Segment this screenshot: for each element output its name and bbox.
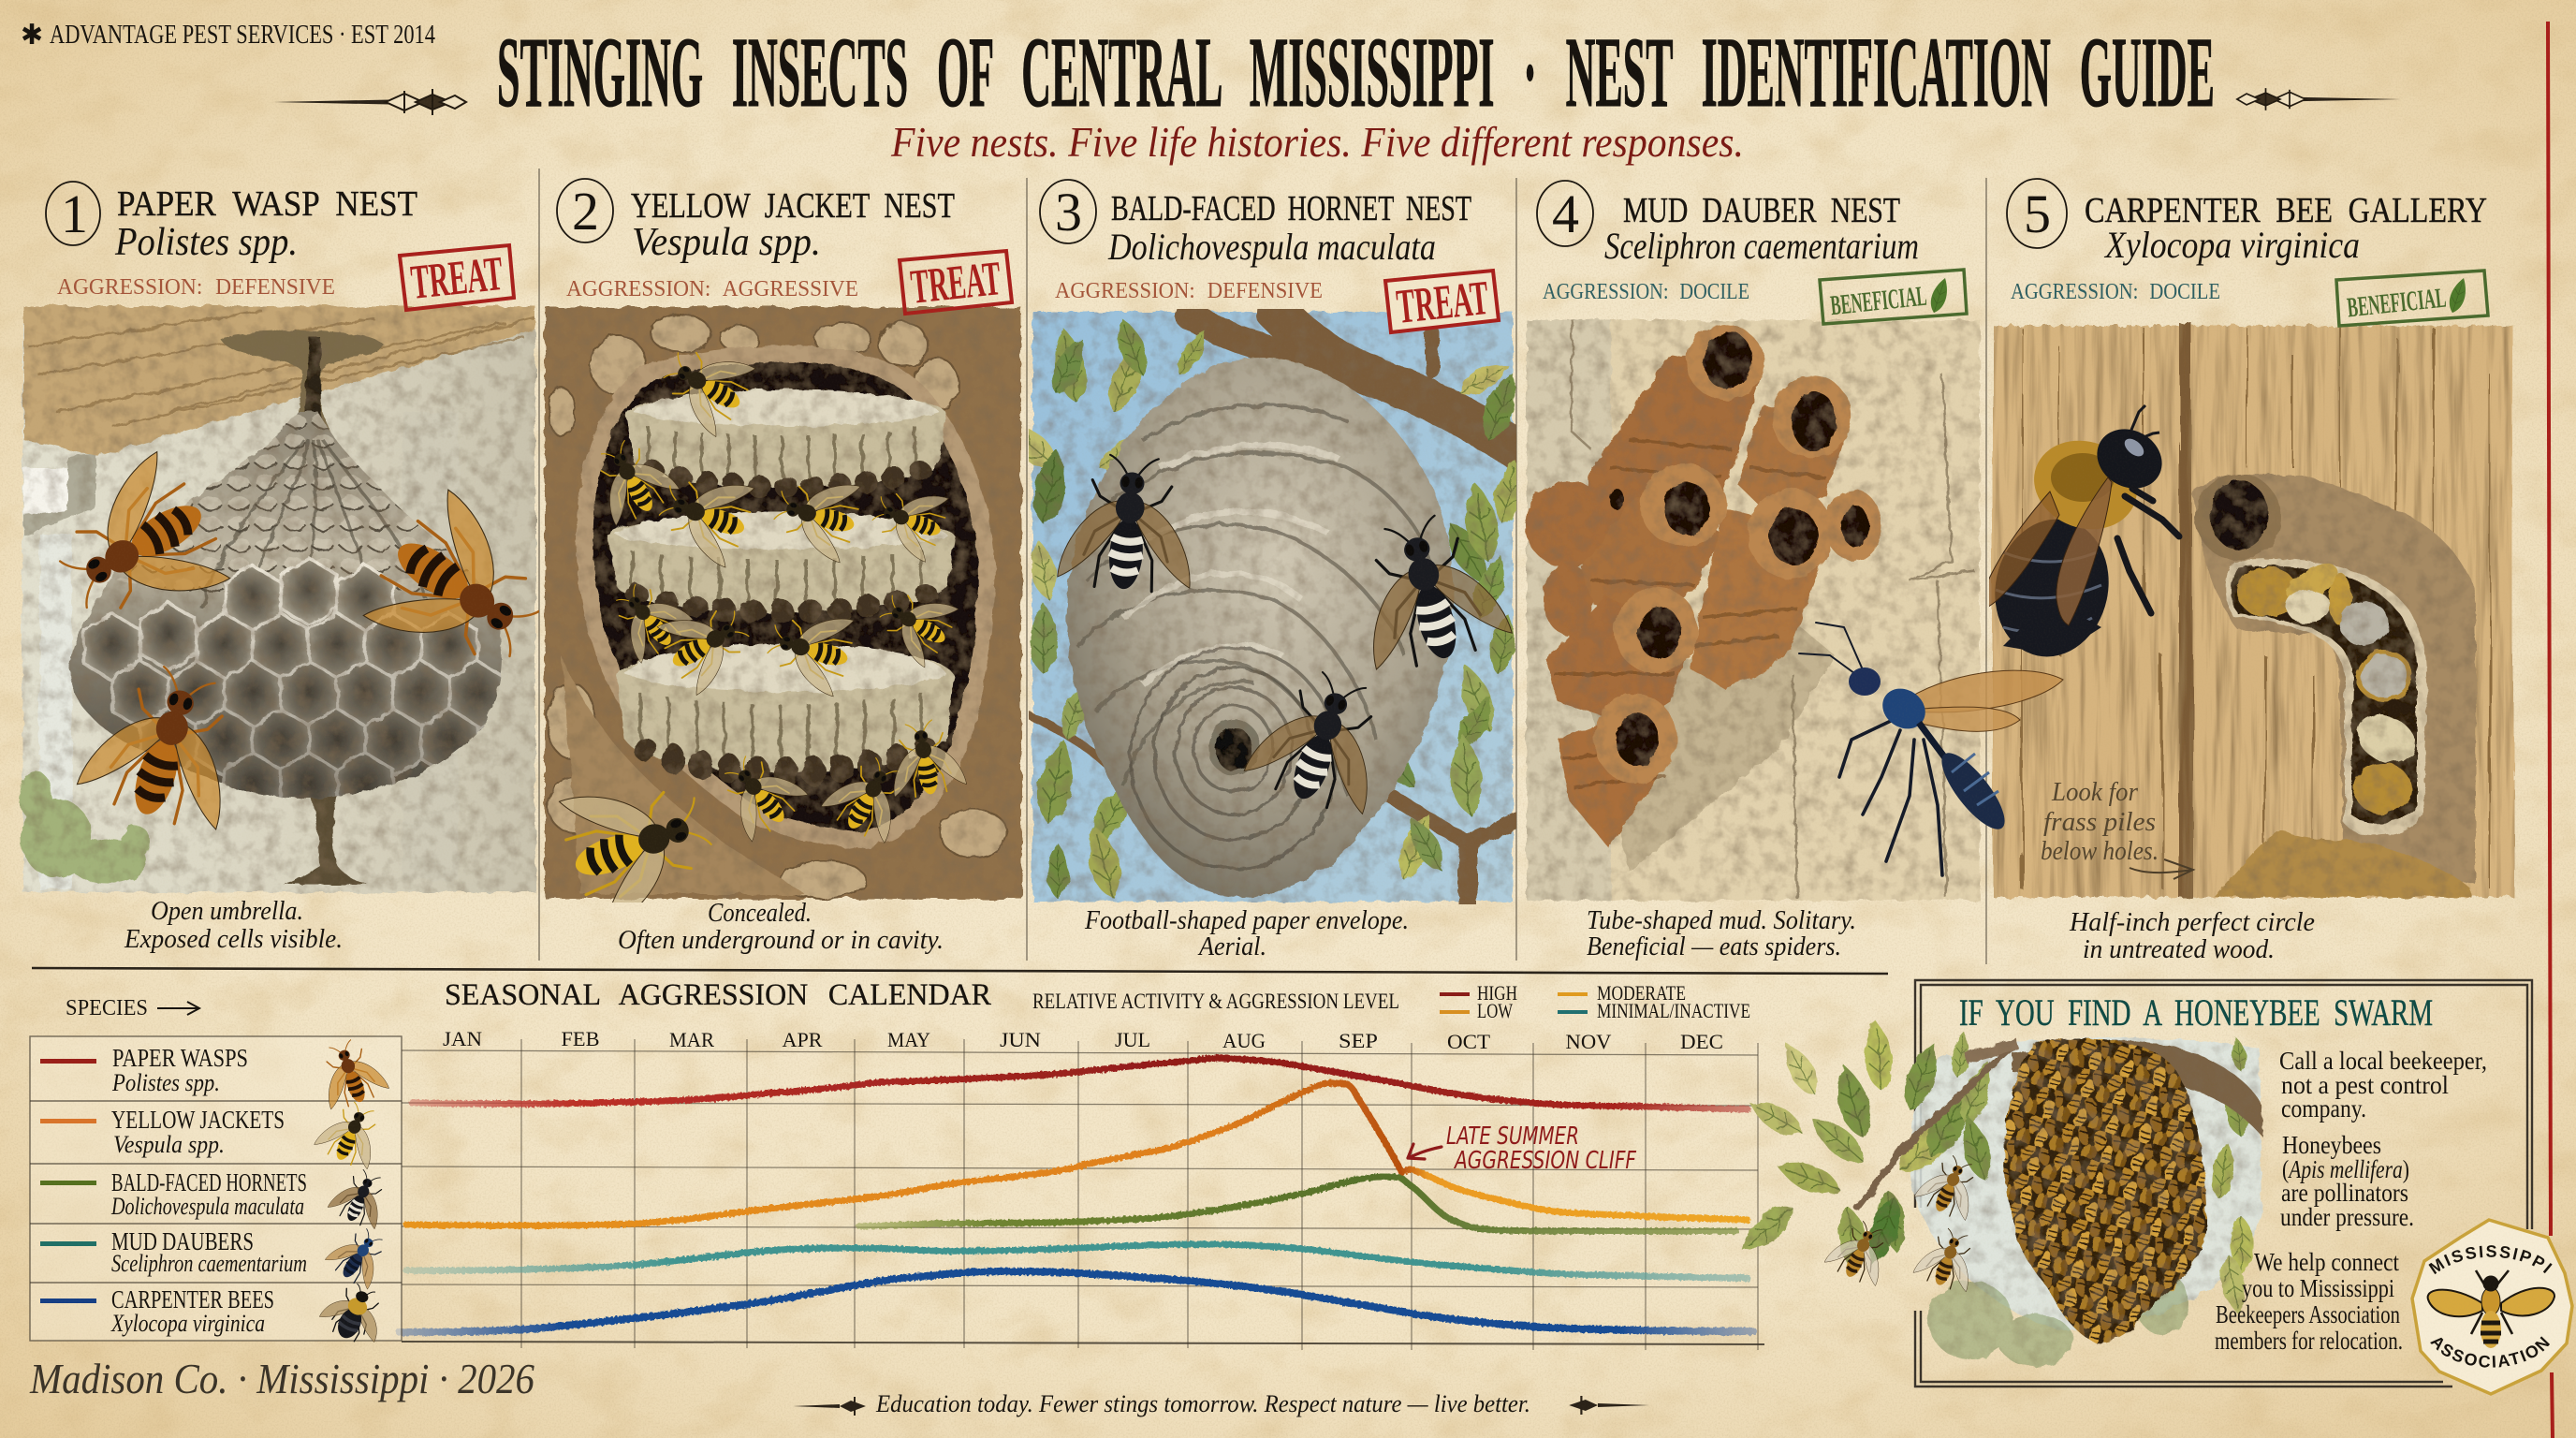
chart grid [402,1039,1764,1350]
curve: bald-faced hornets [859,1177,1736,1231]
flying honeybees [1823,1149,1988,1295]
caption 5: Half-inch perfect circle [2069,907,2315,937]
paper wasp left [58,451,231,609]
curve: mud daubers [406,1244,1748,1278]
medallion: Mississippi Beekeepers Association: ASSOCIATION [2430,1336,2550,1368]
red margin line [2548,22,2553,1438]
caption 1: Exposed cells visible. [124,924,343,954]
mud dauber wasp [1799,623,2063,875]
caption 5 [2069,907,2315,964]
panel 5 header: AGGRESSION: DOCILE [2011,280,2220,304]
caption 4 [1587,905,1856,961]
brand tag: ✱ [21,19,43,51]
yellow jacket group [553,331,967,931]
activity label: RELATIVE ACTIVITY & AGGRESSION LEVEL [1032,990,1399,1013]
row: carpenter bees: CARPENTER BEES [111,1285,274,1313]
column dividers [539,169,1986,964]
month labels: MAR [669,1028,714,1051]
honeybee text top: Call a local beekeeper, [2279,1047,2487,1075]
month labels: DEC [1680,1030,1723,1053]
honeybee text top: company. [2281,1094,2366,1123]
curve: carpenter bees [400,1271,1753,1332]
row: carpenter bees: Xylocopa virginica [110,1310,265,1337]
callout: late summer aggression cliff: AGGRESSION CLIFF [1453,1147,1637,1175]
honeybee text lower [2215,1248,2403,1355]
caption 1: Open umbrella. [151,896,303,926]
panel 2 header [557,179,955,301]
illustration 3: bald-faced hornet nest [995,312,1528,908]
callout: late summer aggression cliff [1408,1123,1637,1175]
note: frass piles: Look for [2051,777,2139,807]
honeybee text middle: are pollinators [2281,1179,2408,1207]
month labels: MAY [887,1028,930,1051]
note: frass piles: frass piles [2043,807,2156,837]
panel 5 header [2007,179,2487,304]
panel 3 header: AGGRESSION: DEFENSIVE [1055,279,1323,303]
panel 4 header: AGGRESSION: DOCILE [1543,280,1749,304]
hornets [1057,451,1514,820]
row: yellow jackets: YELLOW JACKETS [111,1106,285,1134]
month labels: OCT [1447,1030,1491,1053]
month labels: JUL [1115,1028,1150,1051]
row: yellow jackets [40,1094,390,1172]
activity legend: MINIMAL/INACTIVE [1597,999,1750,1022]
stamp: treat 2 [900,251,1012,315]
carpenter bee [1979,405,2179,668]
species table [30,1034,402,1350]
panel 4 header: Sceliphron caementarium [1604,225,1919,267]
panel 3 header [1040,180,1471,303]
row: carpenter bees [40,1275,393,1350]
stamp: beneficial 4 [1820,270,1967,324]
note: frass piles [2041,777,2159,866]
caption 2 [618,898,944,955]
brand tag [21,19,435,51]
species label: SPECIES [66,996,148,1020]
caption 5: in untreated wood. [2083,934,2275,964]
panel 1 header: AGGRESSION: DEFENSIVE [57,275,335,300]
caption 1 [124,896,343,954]
panel 2 header: AGGRESSION: AGGRESSIVE [566,277,858,301]
line chart curves [400,1058,1753,1332]
ornament left [273,89,466,115]
illustration 2: yellow jacket nest [545,307,1021,931]
month labels: NOV [1565,1030,1612,1053]
subtitle: Five nests. Five life histories. Five different responses. [890,119,1744,166]
month labels [443,1027,1723,1053]
caption 3: Football-shaped paper envelope. [1084,905,1409,935]
honeybee text top [2279,1047,2487,1123]
panel 4 header: MUD DAUBER NEST [1623,191,1900,230]
panel 2 header: 2 [572,181,599,242]
paper wasp right [362,489,539,657]
paper wasp lower [77,665,224,830]
panel 5 header: CARPENTER BEE GALLERY [2085,191,2487,230]
row: mud daubers [40,1220,396,1291]
caption 3: Aerial. [1197,932,1266,961]
month labels: APR [783,1028,823,1051]
double border [1915,980,2532,1387]
illustration 5: carpenter bee gallery [1979,323,2513,898]
medallion bee [2428,1270,2554,1348]
honeybee text lower: members for relocation. [2215,1327,2403,1355]
panel 2 header: YELLOW JACKET NEST [631,186,955,226]
stamp: beneficial 5: BENEFICIAL [2346,283,2448,323]
panel 2 header: Vespula spp. [632,221,821,264]
stamp: beneficial 5 [2336,271,2488,326]
caption 3 [1084,905,1409,961]
stamp: treat 1: TREAT [408,247,505,310]
row: yellow jackets: Vespula spp. [113,1131,225,1158]
arrow to frass [2130,859,2193,879]
activity legend: LOW [1477,999,1513,1022]
callout: late summer aggression cliff: LATE SUMMER [1446,1123,1579,1151]
stamp: treat 2: TREAT [908,252,1003,315]
panel 4 header: 4 [1552,183,1579,244]
panel 3 header: 3 [1055,182,1082,242]
caption 4: Tube-shaped mud. Solitary. [1587,905,1856,935]
row: paper wasps [40,1034,390,1112]
row: bald-faced hornets: BALD-FACED HORNETS [111,1168,307,1196]
panel 5 header: Xylocopa virginica [2103,224,2360,266]
row: paper wasps: Polistes spp. [111,1069,220,1096]
month labels: JAN [443,1027,482,1050]
footer tagline: Education today. Fewer stings tomorrow. Respect nature — live better. [875,1390,1530,1417]
panel 1 header: Polistes spp. [114,221,298,264]
activity legend [1440,981,1750,1022]
medallion: Mississippi Beekeepers Association: MISSISSIPPI [2428,1245,2553,1275]
note: frass piles: below holes. [2041,836,2159,866]
ornament right [2237,88,2401,110]
panel 3 header: BALD-FACED HORNET NEST [1111,189,1471,228]
row: paper wasps: PAPER WASPS [112,1044,248,1072]
section rule [32,968,1888,974]
stamp: treat 3 [1385,271,1499,334]
illustration 4: mud dauber nest [1525,314,1980,901]
honeybee text middle: Honeybees [2282,1131,2381,1159]
honeybee text middle: (Apis mellifera) [2282,1155,2409,1183]
caption 2: Often underground or in cavity. [618,925,944,955]
panel: honeybee swarm [1734,980,2532,1387]
curve: yellow jackets [406,1083,1748,1225]
stamp: beneficial 4: BENEFICIAL [1829,281,1928,321]
month labels: SEP [1339,1029,1378,1052]
honeybee text lower: We help connect [2254,1248,2399,1276]
stamp: treat 3: TREAT [1394,271,1491,334]
brand tag: ADVANTAGE PEST SERVICES · EST 2014 [50,20,435,50]
honeybee text top: not a pest control [2281,1071,2449,1099]
stamp: treat 1 [400,245,514,310]
panel 1 header [46,182,417,300]
month labels: JUN [1000,1028,1041,1051]
panel 4 header [1537,181,1919,304]
panel 1 header: PAPER WASP NEST [117,184,417,224]
honeybee text lower: you to Mississippi [2242,1274,2394,1302]
honeybee text lower: Beekeepers Association [2216,1300,2400,1328]
honeybee text middle [2280,1131,2414,1231]
row: mud daubers: MUD DAUBERS [111,1227,254,1255]
month labels: AUG [1222,1029,1266,1052]
paper combs [608,389,955,785]
medallion: Mississippi Beekeepers Association [2410,1218,2574,1396]
honeybee text middle: under pressure. [2280,1203,2414,1231]
signature: Madison Co. · Mississippi · 2026 [29,1355,534,1402]
row: bald-faced hornets: Dolichovespula maculata [110,1193,304,1220]
panel 5 header: 5 [2024,183,2051,244]
row: mud daubers: Sceliphron caementarium [111,1250,307,1277]
curve: paper wasps [412,1058,1748,1109]
caption 2: Concealed. [708,898,812,928]
month labels: FEB [562,1027,599,1050]
species label [66,996,199,1020]
swarm illustration [1734,1019,2263,1367]
panel 3 header: Dolichovespula maculata [1107,226,1436,268]
caption 4: Beneficial — eats spiders. [1587,932,1841,961]
panel 1 header: 1 [61,183,88,244]
row: bald-faced hornets [40,1163,395,1231]
calendar heading: SEASONAL AGGRESSION CALENDAR [445,978,991,1012]
activity legend: MODERATE [1597,981,1686,1005]
illustration 1: paper wasp nest [19,306,567,892]
activity legend: HIGH [1477,981,1517,1005]
